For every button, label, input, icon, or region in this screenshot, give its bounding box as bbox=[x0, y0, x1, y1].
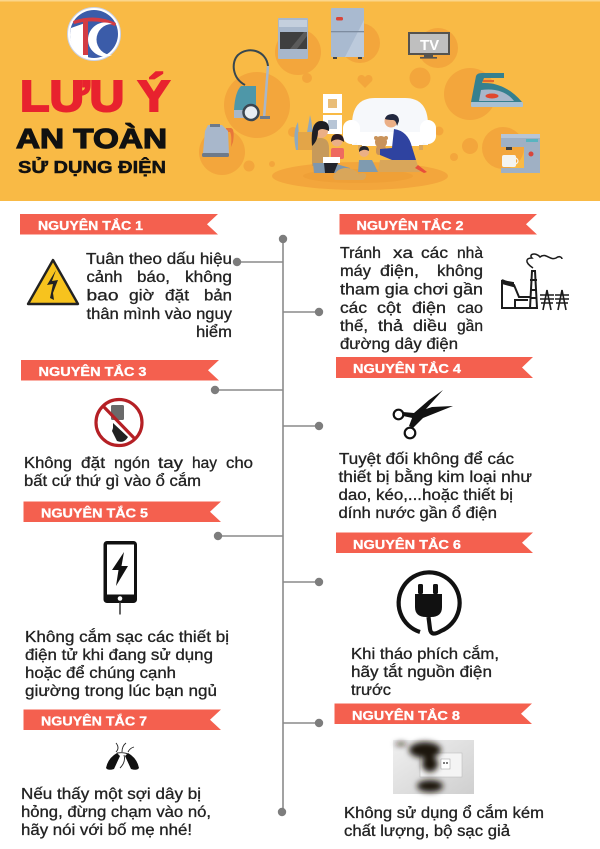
text: rule 4: dao, kéo,...hoặc thiết bị bbox=[338, 487, 513, 504]
title: AN TOÀN: AN TOÀN bbox=[16, 123, 167, 154]
icon: power plant and pylons bbox=[502, 254, 569, 310]
text: rule 3: ngón bbox=[114, 455, 150, 472]
text: rule 5: điện tử khi đang sử dụng bbox=[25, 647, 213, 664]
text: rule 7: hỏng, đừng chạm vào nó, bbox=[21, 804, 211, 821]
icon: kettle bbox=[202, 124, 234, 157]
teddy bear bbox=[374, 136, 388, 155]
text: rule 4: dính nước gần ổ điện bbox=[338, 505, 497, 522]
text: rule 2: thế, bbox=[340, 318, 368, 335]
panel: rule 3 bbox=[21, 360, 253, 490]
text: rule 4 bbox=[338, 451, 532, 522]
text: rule 5: hoặc để chúng cạnh bbox=[25, 665, 176, 682]
icon: stove bbox=[278, 18, 308, 59]
panel: rule 1 bbox=[20, 214, 232, 341]
text: rule 3: đặt bbox=[81, 455, 106, 472]
title: SỬ DỤNG ĐIỆN: SỬ DỤNG ĐIỆN bbox=[18, 156, 166, 177]
text: rule 7: hãy nói với bố mẹ nhé! bbox=[21, 822, 192, 839]
text: rule 1: bao bbox=[86, 288, 118, 304]
text: rule 1: đặt bbox=[165, 288, 190, 304]
ribbon: rule 2: NGUYÊN TẮC 2 bbox=[356, 218, 464, 233]
text: rule 4: thiết bị bằng kim loại như bbox=[338, 469, 532, 486]
ribbon: rule 8 bbox=[334, 704, 532, 724]
panel: rule 8 bbox=[334, 704, 544, 840]
text: rule 2: các bbox=[340, 300, 367, 317]
text: rule 7: Nếu thấy một sợi dây bị bbox=[21, 786, 201, 803]
text: rule 2: gần bbox=[457, 318, 483, 335]
text: rule 8: chất lượng, bộ sạc giả bbox=[344, 823, 510, 840]
text: rule 3: hay bbox=[192, 455, 217, 472]
ribbon: rule 5: NGUYÊN TẮC 5 bbox=[41, 506, 148, 520]
text: rule 2: không bbox=[437, 263, 483, 280]
text: rule 4: Tuyệt đối không để các bbox=[339, 451, 514, 468]
text: rule 1 bbox=[86, 251, 232, 341]
ribbon: rule 7: NGUYÊN TẮC 7 bbox=[41, 714, 147, 728]
text: rule 1: thân mình vào nguy bbox=[86, 306, 232, 323]
ribbon: rule 1 bbox=[20, 214, 218, 234]
text: rule 6: hãy tắt nguồn điện bbox=[351, 664, 492, 681]
text: rule 2: tham gia chơi gần bbox=[340, 282, 483, 298]
icon: TV: TV bbox=[420, 37, 439, 54]
text: rule 2: điện, bbox=[380, 263, 419, 280]
text: rule 2: cao bbox=[457, 300, 483, 317]
text: rule 5 bbox=[25, 629, 229, 700]
header banner bbox=[0, 0, 600, 201]
icon: fridge bbox=[331, 8, 364, 59]
text: rule 3: bất cứ thứ gì vào ổ cắm bbox=[24, 473, 201, 490]
icon: warning triangle bbox=[28, 260, 78, 304]
text: rule 2: đường dây điện bbox=[340, 336, 458, 353]
text: rule 7 bbox=[21, 786, 211, 839]
text: rule 3 bbox=[24, 455, 253, 490]
mother bbox=[312, 121, 350, 173]
son bbox=[358, 146, 378, 172]
panel: rule 5 bbox=[24, 502, 229, 700]
ribbon: rule 6: NGUYÊN TẮC 6 bbox=[353, 537, 461, 552]
text: rule 6 bbox=[351, 646, 499, 699]
ribbon: rule 4 bbox=[336, 357, 533, 378]
text: rule 1: Tuân theo dấu hiệu bbox=[86, 251, 232, 268]
icon: iron bbox=[471, 73, 523, 107]
text: rule 8 bbox=[344, 805, 544, 840]
text: rule 2: thả bbox=[378, 318, 403, 335]
text: rule 2: điện bbox=[412, 300, 446, 317]
text: rule 3: cho bbox=[226, 455, 253, 472]
ribbon: rule 8: NGUYÊN TẮC 8 bbox=[352, 708, 460, 723]
panel: rule 2 bbox=[340, 214, 569, 353]
ribbon: rule 1: NGUYÊN TẮC 1 bbox=[38, 218, 143, 233]
text: rule 1: bản bbox=[204, 288, 232, 304]
icon: coffee machine bbox=[501, 134, 540, 173]
daughter bbox=[323, 134, 344, 173]
timeline bbox=[211, 235, 323, 816]
logo bbox=[68, 8, 120, 60]
ribbon: rule 2 bbox=[340, 214, 537, 234]
text: rule 1: giờ bbox=[129, 288, 154, 304]
text: rule 3: tay bbox=[158, 455, 183, 472]
background circles bbox=[199, 23, 524, 190]
dog bbox=[333, 168, 366, 180]
icon: vacuum cleaner bbox=[234, 50, 270, 120]
text: rule 2: diều bbox=[413, 318, 447, 335]
text: rule 5: Không cắm sạc các thiết bị bbox=[25, 629, 229, 646]
panel: rule 6 bbox=[336, 532, 533, 699]
text: rule 8: Không sử dụng ổ cắm kém bbox=[344, 805, 544, 822]
text: rule 2 bbox=[340, 245, 483, 353]
text: rule 1: báo, bbox=[137, 269, 170, 286]
panel: rule 7 bbox=[21, 710, 221, 839]
text: rule 5: giường trong lúc bạn ngủ bbox=[25, 683, 217, 700]
ribbon: rule 5 bbox=[24, 502, 221, 522]
icon: scissors bbox=[394, 390, 453, 438]
illustration: sofa bbox=[343, 98, 436, 150]
text: rule 2: máy bbox=[340, 263, 371, 280]
panel: rule 4 bbox=[336, 357, 533, 522]
icon: plant and wall frames bbox=[294, 94, 342, 150]
ribbon: rule 4: NGUYÊN TẮC 4 bbox=[353, 361, 461, 376]
text: rule 6: Khi tháo phích cắm, bbox=[351, 646, 499, 663]
text: rule 3: Không bbox=[24, 455, 72, 472]
text: rule 2: các bbox=[421, 245, 448, 262]
text: rule 1: cảnh bbox=[86, 269, 122, 286]
title: LƯU Ý: LƯU Ý bbox=[20, 71, 170, 121]
illustration: family bbox=[303, 114, 427, 183]
text: rule 1: hiểm bbox=[196, 324, 232, 341]
icon: charging phone bbox=[104, 541, 137, 614]
image: burnt wall socket bbox=[393, 740, 474, 794]
text: rule 1: không bbox=[185, 269, 232, 286]
text: rule 2: xa bbox=[393, 245, 413, 262]
text: rule 2: nhà bbox=[457, 245, 483, 262]
ribbon: rule 6 bbox=[336, 532, 533, 553]
ribbon: rule 7 bbox=[24, 710, 221, 730]
text: rule 2: Tránh bbox=[340, 245, 381, 262]
icon: power plug bbox=[399, 572, 460, 634]
icon: no fingers in socket bbox=[96, 400, 142, 446]
text: rule 6: trước bbox=[351, 682, 391, 699]
ribbon: rule 3: NGUYÊN TẮC 3 bbox=[38, 364, 147, 379]
icon: hands with damaged wire bbox=[106, 743, 139, 770]
icon: TV bbox=[408, 32, 450, 59]
father bbox=[378, 114, 427, 173]
text: rule 2: cột bbox=[377, 300, 402, 317]
ribbon: rule 3 bbox=[21, 360, 219, 380]
